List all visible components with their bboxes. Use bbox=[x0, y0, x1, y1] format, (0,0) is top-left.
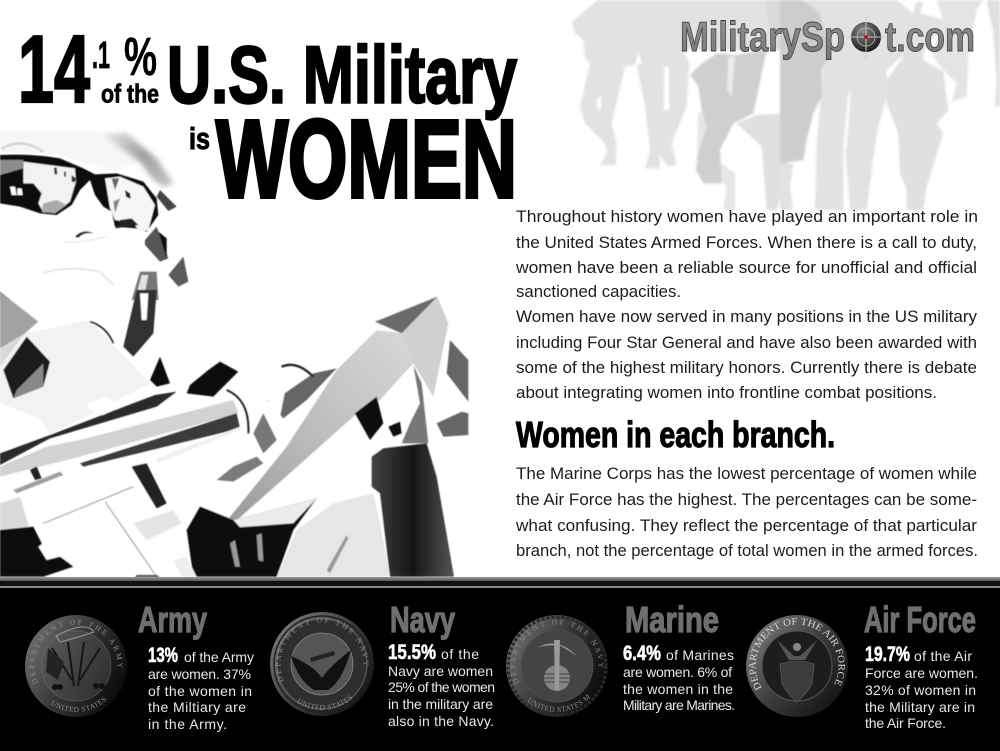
panel: Navy bbox=[270, 599, 495, 729]
panel: Air Force bbox=[746, 599, 978, 731]
icon: Marine seal: DEPARTMENT OF THE NAVY bbox=[510, 620, 604, 684]
title bbox=[18, 16, 517, 221]
text: Navy statistics: also in the Navy. bbox=[388, 713, 494, 729]
U.S. Military: U.S. Military bbox=[167, 30, 517, 120]
branch explanation text: what confusing. They reflect the percentage of that particular bbox=[515, 516, 977, 535]
intro text block: sanctioned capacities. bbox=[516, 282, 681, 301]
photo: face and sunglasses bbox=[0, 131, 188, 300]
text: Army statistics: in the Army. bbox=[148, 716, 227, 732]
icon: Navy seal: UNITED STATES bbox=[298, 694, 352, 710]
text: Navy statistics bbox=[388, 641, 495, 729]
text: Air Force statistics: the Military are in bbox=[865, 699, 975, 715]
branch explanation text: the Air Force has the highest. The percentages can be some- bbox=[516, 490, 977, 509]
text: Air Force statistics: the Air Force. bbox=[865, 715, 946, 731]
text: Marine statistics: Military are Marines. bbox=[623, 697, 735, 713]
intro text block: including Four Star General and have also been awarded with bbox=[516, 333, 977, 352]
branch explanation text bbox=[515, 464, 978, 560]
intro text block: about integrating women into frontline combat positions. bbox=[516, 383, 937, 402]
icon: Marine seal bbox=[506, 615, 608, 717]
text: Marine statistics: the women in the bbox=[623, 681, 733, 697]
intro text block: the United States Armed Forces. When there is a call to duty, bbox=[516, 233, 977, 252]
decimal .1: .1 bbox=[92, 35, 110, 77]
heading: Army: Army bbox=[138, 599, 207, 640]
intro text block: Women have now served in many positions in the US military bbox=[516, 307, 977, 326]
logo: MilitarySpot.com bbox=[680, 13, 975, 60]
icon: target crosshair bbox=[847, 17, 885, 59]
heading: Marine: Marine bbox=[625, 599, 719, 640]
text: Marine statistics: are women. 6% of bbox=[623, 664, 732, 680]
text: Navy statistics: Navy are women bbox=[388, 663, 493, 679]
subheading: Women in each branch.: Women in each branch. bbox=[516, 414, 835, 455]
WOMEN: WOMEN bbox=[216, 98, 517, 221]
icon: Air Force seal: DEPARTMENT OF THE AIR FORCE bbox=[748, 618, 845, 691]
icon: Army seal: DEPARTMENT OF THE ARMY bbox=[30, 620, 122, 684]
text: Army statistics: are women. 37% bbox=[148, 666, 251, 682]
percent sign: % bbox=[124, 27, 157, 87]
photo: woman soldier with rifle bbox=[0, 131, 468, 577]
text: Marine statistics bbox=[623, 642, 735, 713]
intro text block: Throughout history women have played an important role in bbox=[516, 207, 978, 226]
front soldier bbox=[887, 50, 948, 210]
icon: Army seal bbox=[25, 615, 127, 717]
text: Air Force statistics: of the Air bbox=[914, 648, 972, 664]
center and right soldiers bbox=[780, 0, 1000, 210]
background: soldier silhouettes bbox=[572, 0, 1000, 210]
intro text block bbox=[515, 207, 978, 402]
of the: of the bbox=[101, 78, 159, 108]
branch explanation text: The Marine Corps has the lowest percentage of women while bbox=[516, 464, 977, 483]
text: Navy statistics: 25% of the women bbox=[388, 679, 495, 695]
text: Army statistics bbox=[148, 644, 254, 732]
logo: MilitarySpot.com: MilitarySp bbox=[680, 13, 845, 60]
bottom band bbox=[0, 577, 1000, 751]
icon: Army seal: UNITED STATES bbox=[52, 696, 106, 712]
icon: Navy seal: DEPARTMENT OF THE NAVY bbox=[276, 618, 368, 682]
text: Marine statistics: 6.4% bbox=[623, 642, 661, 665]
icon: Marine seal: UNITED STATES MARINE bbox=[528, 694, 590, 712]
heading: Navy: Navy bbox=[390, 599, 455, 640]
intro text block: some of the highest military honors. Currently there is debate bbox=[516, 358, 977, 377]
is: is bbox=[189, 121, 210, 156]
text: Navy statistics: 15.5% bbox=[388, 641, 436, 664]
text: Marine statistics: of Marines bbox=[666, 647, 734, 663]
text: Air Force statistics bbox=[865, 643, 978, 731]
photo: rifle, sling and hand bbox=[0, 290, 468, 577]
icon: Navy seal bbox=[270, 612, 374, 716]
panel: Marine bbox=[506, 599, 735, 717]
text: Air Force statistics: Force are women. bbox=[865, 665, 978, 681]
text: Army statistics: of the women in bbox=[148, 683, 252, 699]
headline number 14: 14 bbox=[18, 16, 90, 123]
darker center soldier bbox=[690, 50, 767, 183]
text: Navy statistics: in the military are bbox=[388, 696, 493, 712]
logo: MilitarySpot.com: t.com bbox=[885, 13, 975, 60]
text: Air Force statistics: 32% of women in bbox=[865, 682, 976, 698]
panel: Army bbox=[25, 599, 254, 732]
left soldiers bbox=[572, 0, 790, 210]
text: Army statistics: 13% bbox=[148, 644, 178, 667]
text: Army statistics: the Miltiary are bbox=[148, 699, 246, 715]
text: Army statistics: of the Army bbox=[184, 649, 254, 665]
branch explanation text: branch, not the percentage of total women in the armed forces. bbox=[516, 541, 978, 560]
intro text block: women have been a reliable source for unofficial and official bbox=[515, 258, 977, 277]
text: Air Force statistics: 19.7% bbox=[865, 643, 910, 666]
text: Navy statistics: of the bbox=[441, 646, 479, 662]
